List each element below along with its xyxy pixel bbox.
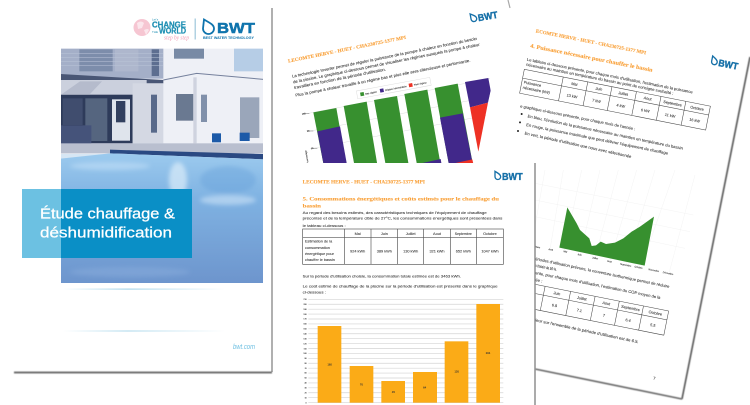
table of required power: 7 kW bbox=[592, 98, 602, 104]
stacked bar chart of regimes: 60 bbox=[311, 148, 314, 150]
power page list text: En bleu, l'évolution de la puissance nécessaire au maintien en température du bassin bbox=[527, 113, 683, 151]
bar chart of heating costs: 160 bbox=[327, 362, 332, 366]
power page heading: 4. Puissance nécessaire pour chauffer le bassin bbox=[530, 43, 654, 74]
table of COP: 6.9 bbox=[551, 303, 557, 308]
table of energy consumption: 1047 kWh bbox=[481, 249, 499, 253]
bar chart of heating costs: 126 bbox=[454, 370, 459, 374]
table of COP bbox=[520, 282, 669, 335]
table of COP: Juillet bbox=[577, 296, 588, 302]
area chart of usage period: Avril bbox=[548, 248, 554, 252]
table of COP: Octobre bbox=[648, 310, 662, 317]
table of energy consumption: 652 kWh bbox=[456, 249, 471, 253]
cost text: Le coût estimé de chauffage de la piscine sur la période d'utilisation est présenté dans le graphique bbox=[303, 283, 499, 288]
text on insulating cover and COP: u bassin de 56 %. bbox=[535, 263, 557, 272]
consumption page heading: 5. Consommations énergétiques et coûts estimés pour le chauffage du bbox=[303, 196, 499, 202]
panel: report page with regime chart bbox=[288, 9, 499, 167]
logo: Change the World bbox=[134, 18, 189, 42]
table of required power: 6 kW bbox=[641, 108, 650, 114]
consumption page intro text: préconisé et de la température cible de 27°C, les consommations énergétiques sont présentées dans bbox=[303, 216, 502, 221]
chart legend bbox=[356, 77, 431, 99]
table of energy consumption: énergétique pour bbox=[305, 252, 335, 256]
icon: BWT logo on consumption page bbox=[495, 171, 523, 183]
bar chart of heating costs: 130 bbox=[303, 338, 308, 340]
area chart of usage period bbox=[532, 170, 695, 276]
consumption page heading: bassin bbox=[303, 204, 322, 210]
power page intro text: Le tableau ci-dessous présente, pour chaque mois d'utilisation, l'estimation de la puissance bbox=[526, 57, 694, 95]
regime page text: travaillera en fonction de la période d'utilisation. bbox=[294, 67, 386, 90]
consumption page intro text: Au regard des besoins estimés, des caractéristiques techniques de l'équipement de chauffage bbox=[303, 210, 488, 215]
photo: house and swimming pool bbox=[61, 49, 264, 283]
bar chart of heating costs: 180 bbox=[303, 314, 308, 316]
cover title text bbox=[40, 206, 175, 242]
bar chart of heating costs: 120 bbox=[303, 343, 308, 345]
stacked bar chart of regimes: 100 bbox=[302, 113, 307, 116]
table of energy consumption: chauffer le bassin bbox=[305, 258, 335, 262]
table of COP: Aout bbox=[602, 301, 611, 307]
table of energy consumption bbox=[303, 229, 503, 264]
regime page text: La technologie Inverter permet de réguler la puissance de la pompe à chaleur en fonction du besoin bbox=[292, 36, 477, 79]
bar chart of heating costs: 60 bbox=[304, 373, 308, 375]
regime page text bbox=[292, 36, 481, 98]
bar chart of heating costs: 20 bbox=[304, 392, 308, 394]
table of required power: 11 kW bbox=[664, 113, 676, 119]
area chart of usage period: Octobre bbox=[634, 265, 644, 270]
bar chart of heating costs: 140 bbox=[303, 334, 308, 336]
stacked bar chart of regimes: 80 bbox=[307, 130, 310, 133]
chart legend: Régime intermédiaire bbox=[385, 85, 408, 92]
area chart of usage period: Décembre bbox=[662, 271, 674, 276]
panel: brochure cover bbox=[14, 8, 272, 374]
chart legend: Plein régime bbox=[414, 81, 428, 87]
cover title text: Étude chauffage & bbox=[40, 206, 175, 222]
bar chart of heating costs: 170 bbox=[303, 319, 308, 321]
power page intro text: nécessaire au maintien en température du bassin au point de consigne souhaité : bbox=[526, 62, 674, 96]
logo: Change the World: WORLD bbox=[159, 27, 186, 36]
table of COP: 7 bbox=[602, 314, 605, 318]
logo: Change the World: step by step bbox=[164, 36, 189, 42]
table of required power: Puissance bbox=[523, 81, 541, 88]
bar chart of heating costs: 80 bbox=[304, 363, 308, 365]
bar chart of heating costs: 90 bbox=[304, 358, 308, 360]
text on insulating cover and COP bbox=[535, 256, 671, 300]
table of COP: 7.1 bbox=[576, 308, 582, 313]
table of required power: Octobre bbox=[690, 105, 704, 112]
area chart of usage period: Juin bbox=[577, 254, 582, 257]
table of energy consumption: Octobre bbox=[483, 232, 497, 236]
text on insulating cover and COP: ée : bbox=[535, 277, 543, 283]
bar chart of heating costs: 76 bbox=[360, 382, 363, 386]
area chart of usage period: Mai bbox=[563, 251, 568, 254]
bar chart of heating costs: 204 bbox=[486, 351, 491, 355]
bar chart of heating costs: 150 bbox=[303, 329, 308, 331]
table of COP: Juin bbox=[553, 291, 561, 296]
stacked bar chart of regimes: Pourcentage bbox=[304, 149, 310, 164]
icon: BWT logo on regime page bbox=[469, 11, 498, 22]
table of COP: 5.5 bbox=[650, 323, 656, 328]
bar chart of heating costs: 0 bbox=[306, 402, 308, 404]
cost text bbox=[303, 283, 499, 295]
table of energy consumption: 924 kWh bbox=[350, 249, 365, 253]
area chart of usage period: Mars bbox=[535, 245, 541, 249]
table of energy consumption: Septembre bbox=[455, 232, 472, 236]
table of energy consumption: Mai bbox=[355, 232, 361, 236]
table of COP: 6.4 bbox=[625, 318, 632, 323]
table of required power bbox=[520, 69, 710, 130]
panel: report page with energy consumption bbox=[285, 163, 535, 405]
icon: BWT logo on consumption page: BWT bbox=[502, 172, 523, 183]
text on insulating cover and COP: ériodes d'utilisation prévues, la couverture isothermique permet de réduire bbox=[535, 256, 671, 289]
bar chart of heating costs: 10 bbox=[304, 397, 308, 399]
consumption page heading bbox=[303, 196, 499, 210]
bar chart of heating costs: 70 bbox=[304, 368, 308, 370]
area chart of usage period: Juillet bbox=[592, 256, 599, 261]
bar chart of heating costs: 30 bbox=[304, 388, 308, 390]
page number: 7 bbox=[653, 375, 657, 381]
table of required power: 16 kW bbox=[689, 118, 701, 124]
logo: BWT: BEST WATER TECHNOLOGY bbox=[203, 36, 255, 40]
bar chart of heating costs: 190 bbox=[303, 309, 308, 311]
table of energy consumption: 130 kWh bbox=[403, 249, 418, 253]
stacked bar chart of regimes bbox=[302, 78, 491, 167]
power page list text: e graphique ci-dessous présente, pour chaque mois de l'année : bbox=[520, 103, 636, 131]
text on insulating cover and COP: ente, pour chaque mois d'utilisation, l'estimation du COP moyen de la bbox=[535, 270, 662, 300]
consumption page intro text: le tableau ci-dessous : bbox=[303, 223, 346, 228]
table of energy consumption: Aout bbox=[433, 232, 442, 236]
table of energy consumption: 321 kWh bbox=[429, 249, 445, 253]
cost text: ci-dessous : bbox=[303, 290, 326, 295]
COP average text: leur sur l'ensemble de la période d'utilisation est de 6.5. bbox=[535, 317, 639, 344]
regime page title: LECOMTE HERVE - HUET - CHA230725-1377 MPI bbox=[288, 36, 407, 65]
area chart of usage period: Novembre bbox=[648, 268, 660, 273]
power page list text: En rouge, la puissance maximale que peut délivrer l'équipement de chauffage bbox=[526, 122, 669, 156]
table of required power: Juin bbox=[595, 87, 603, 92]
table of energy consumption: consommation bbox=[305, 246, 330, 250]
chart legend: Bas régime bbox=[365, 90, 378, 96]
website text: bwt.com bbox=[233, 344, 255, 351]
table of energy consumption: Juin bbox=[381, 232, 388, 236]
table of required power: Mai bbox=[571, 82, 578, 87]
logo: Change the World: CHANGE bbox=[152, 20, 186, 30]
icon: BWT logo on regime page: BWT bbox=[477, 10, 499, 24]
table of required power: 4 kW bbox=[616, 103, 626, 109]
title box bbox=[22, 189, 192, 258]
bar chart of heating costs: 64 bbox=[423, 385, 427, 389]
table of energy consumption: 389 kWh bbox=[377, 249, 392, 253]
logo: Change the World: THE bbox=[152, 30, 158, 34]
icon: BWT logo on power page: BWT bbox=[717, 58, 739, 73]
consumption page title: LECOMTE HERVE - HUET - CHA230725-1377 MPI bbox=[303, 181, 425, 186]
logo: Change the World: Let's bbox=[152, 18, 159, 22]
table of required power: Juillet bbox=[618, 91, 629, 97]
table of required power: Septembre bbox=[663, 100, 682, 108]
total consumption text: Sur la période d'utilisation choisie, la consommation totale estimée est de 3463 kWh. bbox=[303, 274, 461, 279]
divider bbox=[194, 18, 197, 40]
power page title: ECOMTE HERVE - HUET - CHA230725-1377 MPI bbox=[535, 29, 647, 56]
area chart of usage period: Aout bbox=[607, 260, 612, 264]
power page list text: En vert, la période d'utilisation que nous avez sélectionnée bbox=[524, 130, 633, 159]
logo: BWT bbox=[203, 20, 255, 40]
consumption page intro text bbox=[303, 210, 502, 228]
bar chart of heating costs bbox=[303, 299, 503, 404]
bar chart of heating costs: 45 bbox=[392, 390, 395, 394]
bar chart of heating costs: 50 bbox=[304, 378, 308, 380]
power page list text bbox=[517, 103, 683, 159]
panel: report page with required power bbox=[477, 0, 750, 399]
bar chart of heating costs: 210 bbox=[303, 299, 308, 301]
table of required power: 13 kW bbox=[566, 93, 578, 100]
bar chart of heating costs: 100 bbox=[303, 353, 308, 355]
bar chart of heating costs: 200 bbox=[303, 304, 308, 306]
logo: BWT: BWT bbox=[217, 20, 255, 37]
regime page text: Plus la pompe à chaleur travaille à un régime bas et plus elle sera silencieuse et performante. bbox=[295, 58, 471, 98]
bar chart of heating costs: 110 bbox=[303, 348, 308, 350]
bar chart of heating costs: 160 bbox=[303, 324, 308, 326]
table of energy consumption: Estimation de la bbox=[305, 240, 333, 244]
regime page text: de la piscine. Le graphique ci-dessous permet de visualiser les régimes auxquels la pompe à chaleur bbox=[293, 42, 481, 84]
table of required power: Aout bbox=[643, 96, 653, 102]
table of required power: nécessaire (kW) bbox=[522, 86, 551, 95]
cover title text: déshumidification bbox=[40, 226, 172, 242]
area chart of usage period: Septembre bbox=[620, 263, 632, 268]
bar chart of heating costs: 40 bbox=[304, 383, 308, 385]
table of COP: Septembre bbox=[621, 305, 640, 312]
icon: BWT logo on power page bbox=[710, 56, 739, 73]
table of energy consumption: Juillet bbox=[406, 232, 416, 236]
